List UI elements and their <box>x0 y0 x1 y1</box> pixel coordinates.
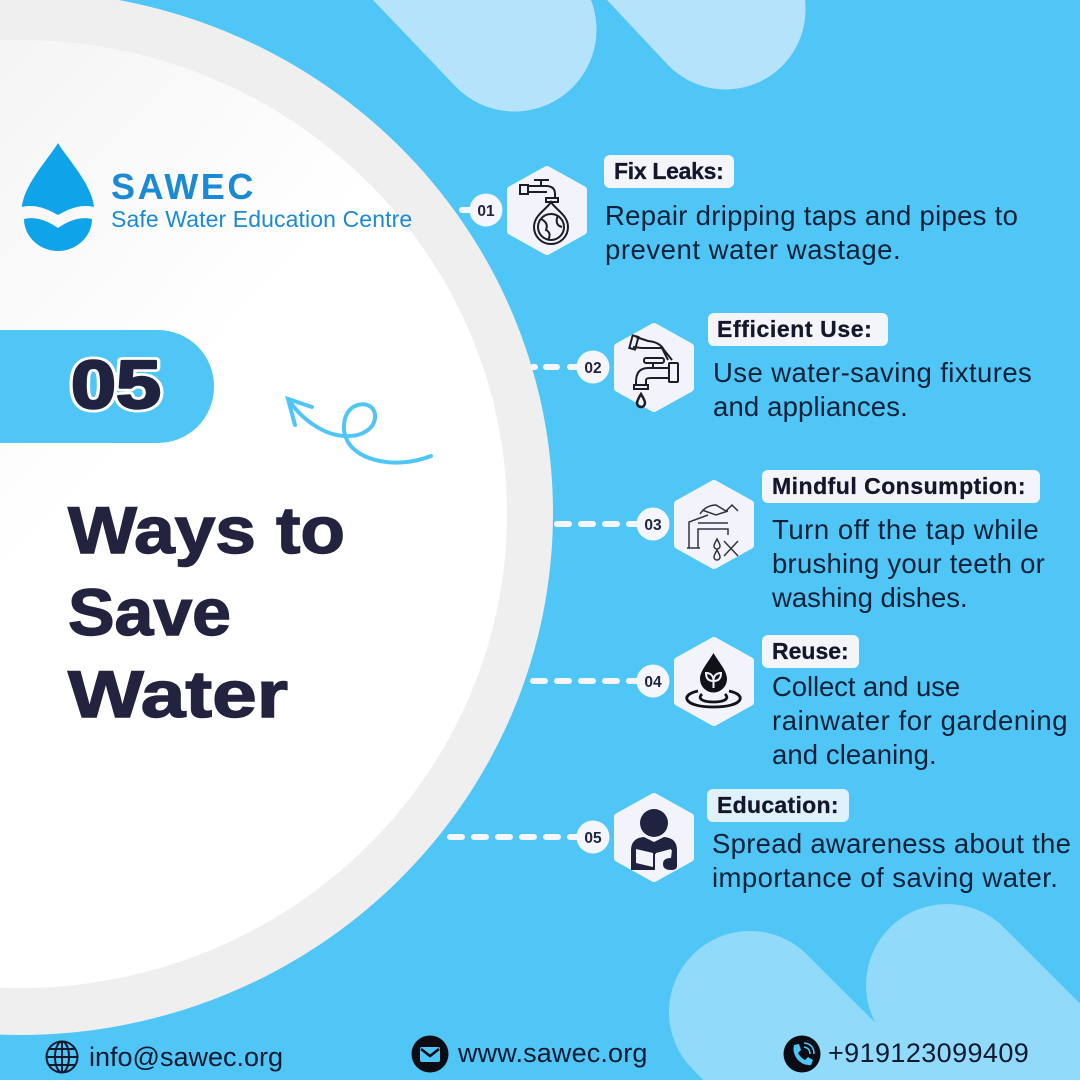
connector and number 01 <box>459 194 502 226</box>
curly arrow <box>285 396 434 465</box>
description <box>712 828 1071 893</box>
logo wordmark: Safe Water Education Centre <box>111 206 412 232</box>
logo: water drop <box>22 143 94 251</box>
connector and number 03 <box>554 508 670 540</box>
description: Turn off the tap while <box>772 514 1039 545</box>
logo wordmark: SAWEC <box>111 166 256 207</box>
website address: www.sawec.org <box>458 1038 648 1068</box>
big number 05: 05 <box>71 347 161 423</box>
connector and number 05: 05 <box>584 830 602 847</box>
description <box>772 514 1045 613</box>
description: rainwater for gardening <box>772 705 1068 736</box>
email address: info@sawec.org <box>89 1042 283 1072</box>
connector <box>530 678 637 684</box>
label: Education: <box>717 792 839 818</box>
item 04: reuse <box>530 635 1068 770</box>
description: prevent water wastage. <box>605 234 901 265</box>
footer: phone <box>784 1036 1029 1072</box>
big number 05: 05 <box>71 347 161 423</box>
description <box>605 200 1018 265</box>
description: and cleaning. <box>772 739 937 770</box>
title: Save <box>68 575 231 649</box>
icon: globe <box>46 1040 78 1074</box>
description: Use water-saving fixtures <box>713 357 1032 388</box>
icon: envelope <box>412 1036 448 1072</box>
item 03: mindful consumption <box>554 470 1045 613</box>
icon: hand and tap <box>614 323 694 412</box>
label: Mindful Consumption: <box>772 473 1026 499</box>
title <box>67 493 345 730</box>
logo wordmark <box>111 166 412 232</box>
icon: tap and globe <box>507 166 587 255</box>
connector and number 02: 02 <box>584 360 602 377</box>
icon: drop with sprout <box>674 637 754 726</box>
footer: website <box>412 1036 648 1072</box>
item 05: education <box>447 789 1071 893</box>
description: brushing your teeth or <box>772 548 1045 579</box>
description: Spread awareness about the <box>712 828 1071 859</box>
label <box>604 155 734 188</box>
footer: email <box>46 1040 283 1074</box>
phone number: +919123099409 <box>828 1038 1029 1068</box>
icon: tap off <box>674 480 754 569</box>
number 04 <box>636 664 670 698</box>
description <box>713 357 1032 422</box>
title: Water <box>68 657 288 730</box>
label: Efficient Use: <box>717 316 872 342</box>
number 04: 04 <box>644 674 662 691</box>
icon: person reading <box>614 793 694 882</box>
label <box>762 635 859 668</box>
label <box>708 313 888 346</box>
title: Ways to <box>68 493 345 567</box>
item 02: efficient use <box>530 313 1032 422</box>
label <box>707 789 849 822</box>
connector and number 03: 03 <box>644 517 662 534</box>
connector and number 02 <box>530 350 610 384</box>
description: washing dishes. <box>772 582 968 613</box>
description: importance of saving water. <box>712 862 1058 893</box>
icon: phone <box>784 1036 820 1072</box>
description: Repair dripping taps and pipes to <box>605 200 1018 231</box>
description <box>772 671 1068 770</box>
connector and number 05 <box>447 820 610 854</box>
item 01: fix leaks <box>459 155 1018 265</box>
description: and appliances. <box>713 391 908 422</box>
label: Fix Leaks: <box>614 158 724 184</box>
label: Reuse: <box>772 638 849 664</box>
connector and number 01: 01 <box>477 203 495 220</box>
description: Collect and use <box>772 671 960 702</box>
